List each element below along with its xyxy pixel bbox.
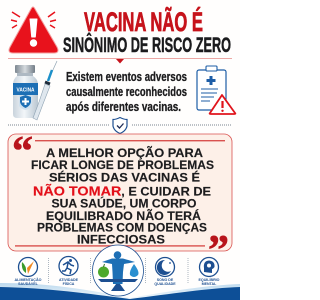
footer wave [0, 283, 240, 300]
quote text: PROBLEMAS COM DOENÇAS [37, 222, 207, 234]
icon: body balance [92, 245, 144, 296]
icon: quality sleep: QUALIDADE [154, 282, 176, 286]
background [0, 0, 240, 300]
quote text: INFECCIOSAS [77, 234, 165, 246]
icon: physical activity [59, 256, 79, 286]
icon: mental balance: EQUILÍBRIO [199, 277, 220, 282]
icon: mental balance [199, 258, 220, 286]
icon: healthy food [14, 258, 42, 286]
quote text: EQUILIBRADO NÃO TERÁ [46, 210, 201, 223]
quote top rule [35, 140, 225, 141]
icon: vaccine vial and syringe [13, 61, 57, 120]
icon: healthy food: ALIMENTAÇÃO [14, 277, 42, 282]
icon: vaccine vial and syringe: VACINA [16, 88, 35, 94]
quote text: A MELHOR OPÇÃO PARA [46, 147, 203, 160]
text block: adverse events [66, 70, 187, 114]
title [63, 6, 231, 57]
icon: mental balance: MENTAL [202, 282, 217, 286]
opening quote mark: “ [12, 129, 33, 175]
icon: healthy food: SAUDÁVEL [18, 281, 39, 286]
text block: adverse events: Existem eventos adversos [66, 70, 187, 84]
icon: physical activity: FÍSICA [63, 281, 75, 286]
icon: physical activity: ATIVIDADE [59, 278, 79, 282]
quote text: NÃO TOMAR , E CUIDAR DE [33, 184, 211, 198]
icon: clipboard with alert [197, 66, 235, 114]
icon: quality sleep: SONO DE [157, 278, 174, 282]
dotted divider [8, 124, 232, 126]
text block: adverse events: após diferentes vacinas. [66, 100, 181, 114]
quote text: SÉRIOS DAS VACINAS É [49, 172, 200, 184]
icon: shield check [113, 118, 127, 134]
icon: warning triangle [9, 7, 58, 53]
title divider [8, 58, 232, 64]
quote bottom rule [15, 245, 205, 247]
icon: quality sleep [154, 258, 176, 286]
quote text: SUA SAÚDE, UM CORPO [52, 198, 197, 210]
closing quote mark: ” [208, 228, 229, 274]
quote text [31, 147, 214, 246]
text block: adverse events: causalmente reconhecidos [66, 85, 187, 99]
panel: quote [8, 129, 232, 274]
quote text: FICAR LONGE DE PROBLEMAS [31, 160, 214, 172]
footer dotted separators [48, 258, 188, 283]
